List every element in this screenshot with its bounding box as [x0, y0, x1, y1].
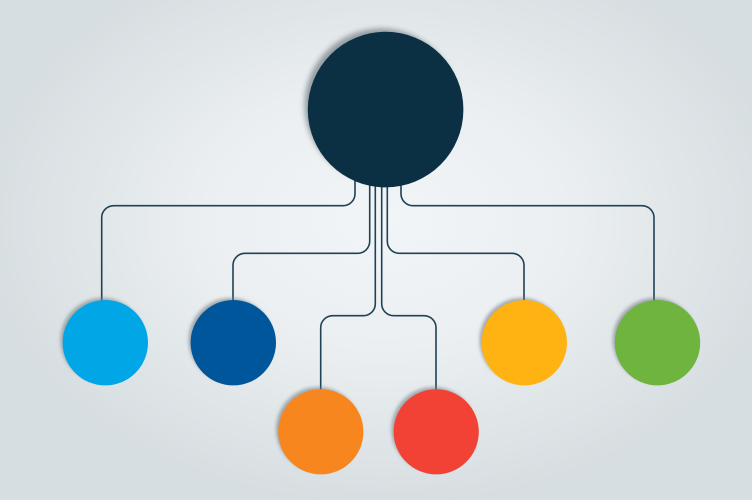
connector: to orange circle [321, 180, 375, 391]
connector lines [102, 180, 654, 391]
circle: light blue [61, 298, 148, 385]
connector: to dark blue circle [233, 180, 370, 302]
circle: red [392, 387, 479, 474]
circle: dark blue [189, 298, 276, 385]
circle: green [613, 298, 700, 385]
circle: yellow [480, 298, 567, 385]
circle: orange [276, 387, 363, 474]
parent circle [304, 28, 463, 187]
connector: to red circle [382, 180, 436, 391]
connector: to yellow circle [387, 180, 524, 302]
connector: to green circle [401, 180, 654, 302]
connector: to light blue circle [102, 180, 355, 302]
